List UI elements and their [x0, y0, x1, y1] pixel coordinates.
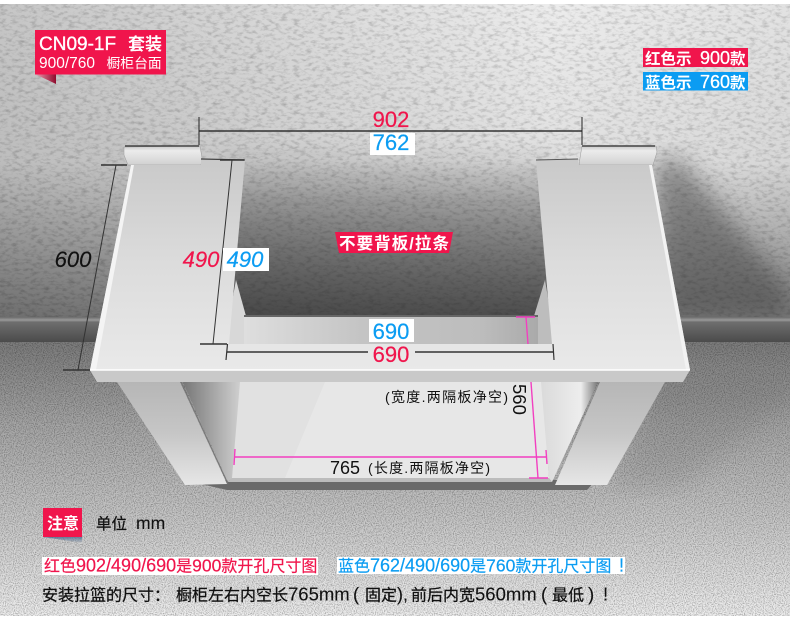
- left back tab: [124, 146, 202, 165]
- legend: blue 760: 760: [700, 72, 730, 92]
- tag: model badge: 套装: [128, 34, 162, 54]
- note: basket size line: !: [603, 584, 608, 604]
- right back tab: [579, 146, 657, 165]
- note: basket size line: 560mm: [475, 584, 537, 604]
- label 690 blue: 690: [373, 319, 409, 344]
- baseboard: [0, 317, 790, 342]
- background: concrete wall: [0, 4, 790, 330]
- note: basket size line: 前后内宽: [411, 586, 475, 604]
- right inner side: [541, 382, 598, 482]
- dimension: 490 / 490 notch depth: [183, 160, 269, 344]
- cabinet interior: [232, 382, 549, 478]
- note: red size line: 红色902/490/690是900款开孔尺寸图: [44, 556, 317, 576]
- legend: red 900: 900: [700, 48, 730, 68]
- note badge: [43, 508, 82, 543]
- legend: red 900: 款: [730, 51, 746, 68]
- note: basket size line: 固定: [365, 586, 397, 604]
- right leg: [555, 382, 665, 485]
- unit text: mm: [136, 513, 165, 533]
- note: basket size line: ): [588, 584, 594, 604]
- label width note: (宽度.两隔板净空): [385, 389, 508, 405]
- dimension: 600 depth: [55, 165, 127, 370]
- tag: model badge: [35, 30, 166, 84]
- countertop surface: [90, 159, 690, 370]
- legend: [643, 48, 748, 92]
- note: basket size line: 安装拉篮的尺寸：: [42, 588, 170, 604]
- label 762: 762: [373, 130, 409, 155]
- countertop front face: [90, 370, 690, 382]
- left leg: [117, 382, 227, 485]
- note: basket size line: (: [541, 584, 548, 604]
- legend: blue 760: 蓝色示: [645, 75, 692, 92]
- dimension: 902 / 762 top width: [199, 107, 582, 155]
- legend: blue 760: [643, 72, 748, 92]
- note: basket size line: 765mm: [288, 584, 350, 604]
- legend: blue 760: 款: [730, 75, 746, 92]
- label 902: 902: [373, 107, 409, 132]
- tag: model badge: 橱柜台面: [106, 56, 162, 71]
- tag: model badge: CN09-1F: [39, 34, 116, 55]
- unit text: 单位: [96, 516, 127, 533]
- note: blue size line: 蓝色762/490/690是760款开孔尺寸图: [338, 556, 611, 576]
- left inner side: [183, 382, 240, 482]
- legend: red 900: [643, 48, 748, 68]
- label 490 red: 490: [183, 247, 220, 272]
- note: basket size line: 最低: [552, 586, 584, 604]
- dimension: 600 depth: 600: [55, 247, 92, 272]
- label length note: (长度.两隔板净空): [368, 460, 490, 476]
- note: basket size line: (: [353, 584, 360, 604]
- cabinet: [90, 146, 690, 490]
- tag: model badge: 900/760: [39, 55, 95, 72]
- note: basket size line: ),: [397, 584, 408, 604]
- dimension: 560 width (pink): [385, 317, 548, 478]
- note badge: 注意: [47, 514, 79, 533]
- dimension: 690 / 690 inner width: [226, 319, 554, 367]
- label 765: 765: [330, 458, 360, 478]
- floor: [0, 342, 790, 616]
- label 560 rotated: 560: [509, 384, 530, 415]
- note: blue size line: !: [619, 556, 624, 576]
- dimension: 765 length (pink): [234, 449, 547, 478]
- label 690 red: 690: [373, 342, 409, 367]
- cabinet upper back panel: [224, 280, 556, 346]
- floor shadow under cabinet: [184, 480, 596, 490]
- label 490 blue: 490: [227, 247, 264, 272]
- legend: red 900: 红色示: [645, 51, 692, 68]
- note: basket size line: 橱柜左右内空长: [176, 586, 288, 604]
- callout: no back panel: 不要背板/拉条: [339, 233, 450, 253]
